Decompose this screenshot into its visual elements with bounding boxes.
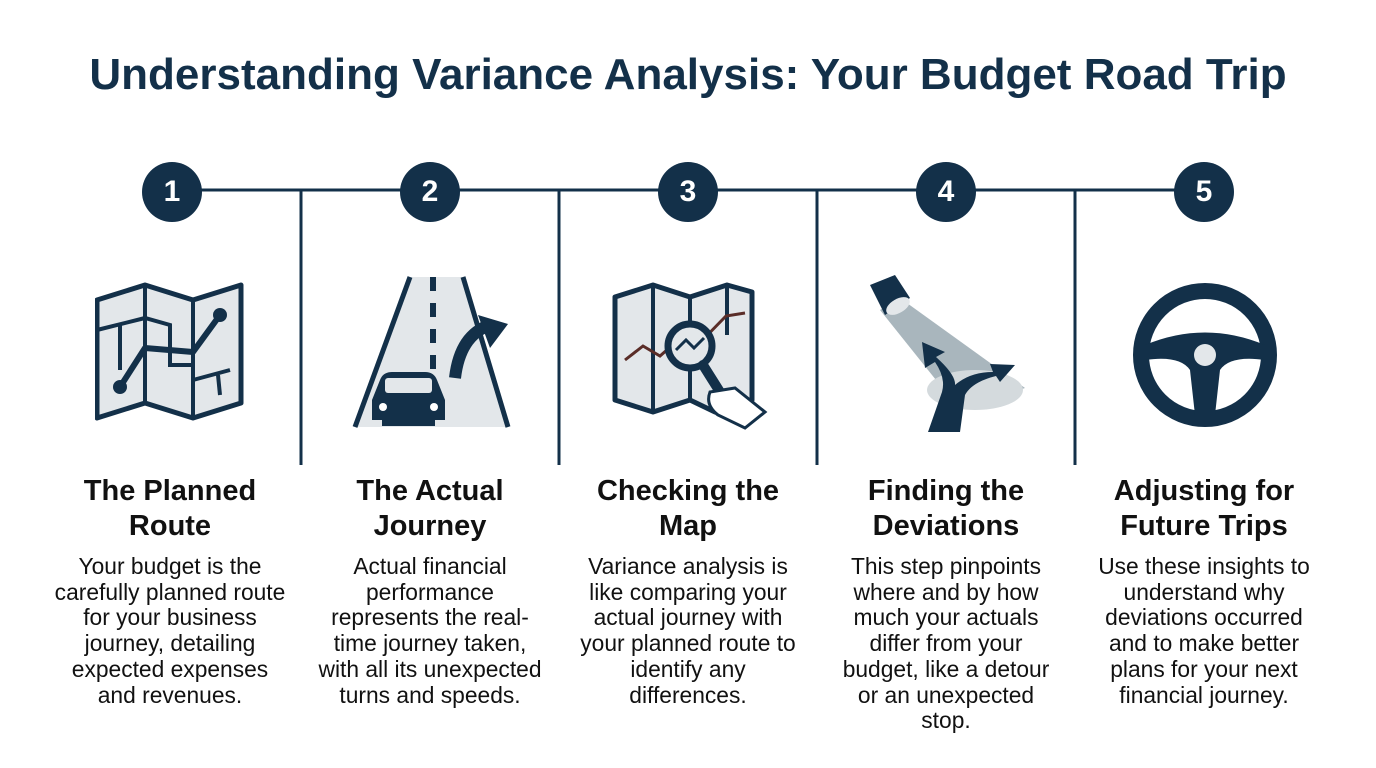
column 4 text: budget, like a detour	[843, 656, 1049, 682]
column 2 text: represents the real-	[331, 604, 529, 630]
step number 4	[916, 162, 976, 222]
column 3 text: Checking the	[597, 475, 779, 507]
icon: steering wheel	[1133, 283, 1277, 427]
column 5 text	[1098, 475, 1310, 708]
column 4 text: Deviations	[873, 510, 1019, 542]
column 1 text: journey, detailing	[85, 630, 255, 656]
step number 2	[400, 162, 460, 222]
title: Understanding Variance Analysis: Your Budget Road Trip	[89, 50, 1287, 99]
column 1 text: for your business	[83, 604, 257, 630]
column 2 text: Journey	[374, 510, 486, 542]
column 5 text: deviations occurred	[1105, 604, 1303, 630]
column 4 text	[843, 475, 1049, 733]
column 5 text: Future Trips	[1120, 510, 1288, 542]
column 1 text: expected expenses	[72, 656, 268, 682]
column 3 text: actual journey with	[594, 604, 782, 630]
step number 3	[658, 162, 718, 222]
column 1 text: Your budget is the	[79, 553, 261, 579]
column 5 text: Use these insights to	[1098, 553, 1310, 579]
column 1 text	[55, 475, 285, 708]
column 4 text: where and by how	[853, 579, 1039, 605]
column 3 text: differences.	[629, 682, 747, 708]
step number 3: 3	[680, 175, 696, 208]
column 3 text: identify any	[630, 656, 746, 682]
icon: map with magnifier	[612, 282, 768, 430]
column 5 text: and to make better	[1109, 630, 1299, 656]
step number 5	[1174, 162, 1234, 222]
step number 1: 1	[164, 175, 180, 208]
column 2 text	[318, 475, 542, 708]
column 4 text: differ from your	[870, 630, 1022, 656]
column 2 text: turns and speeds.	[339, 682, 521, 708]
column 5 text: plans for your next	[1110, 656, 1298, 682]
column 1 text: and revenues.	[98, 682, 242, 708]
column 4 text: much your actuals	[854, 604, 1038, 630]
column 3 text: Variance analysis is	[588, 553, 788, 579]
step number 4: 4	[938, 175, 954, 208]
step number 2: 2	[422, 175, 438, 208]
column 4 text: Finding the	[868, 475, 1024, 507]
column 1 text: The Planned	[84, 475, 256, 507]
column 2 text: Actual financial	[353, 553, 507, 579]
column 2 text: time journey taken,	[334, 630, 526, 656]
column 4 text: stop.	[921, 707, 971, 733]
column 3 text: your planned route to	[580, 630, 796, 656]
icon: road with car and arrow	[352, 276, 510, 428]
column 3 text: Map	[659, 510, 717, 542]
column 4 text: or an unexpected	[858, 682, 1034, 708]
column 2 text: with all its unexpected	[318, 656, 542, 682]
step number 1	[142, 162, 202, 222]
column 2 text: The Actual	[356, 475, 504, 507]
column 4 text: This step pinpoints	[851, 553, 1041, 579]
column 2 text: performance	[366, 579, 494, 605]
icon: map with route	[95, 282, 244, 420]
icon: spotlight on fork	[870, 275, 1025, 432]
column 3 text: like comparing your	[589, 579, 787, 605]
column 5 text: Adjusting for	[1114, 475, 1294, 507]
step number 5: 5	[1196, 175, 1212, 208]
column 1 text: carefully planned route	[55, 579, 285, 605]
column 3 text	[580, 475, 796, 708]
column 5 text: understand why	[1124, 579, 1284, 605]
column 5 text: financial journey.	[1119, 682, 1289, 708]
column 1 text: Route	[129, 510, 211, 542]
